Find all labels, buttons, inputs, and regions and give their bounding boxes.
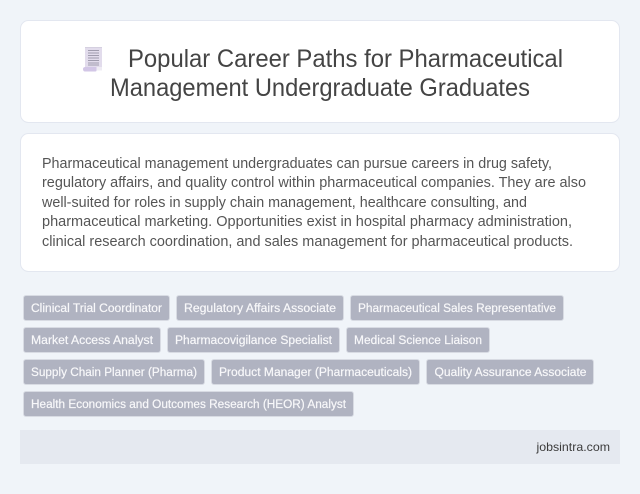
text block: description: well-suited for roles in supply chain management, healthcare consulting, and bbox=[41, 195, 527, 211]
tag: Product Manager (Pharmaceuticals) bbox=[212, 360, 420, 384]
tag: Pharmaceutical Sales Representative bbox=[350, 296, 564, 320]
tag: Health Economics and Outcomes Research (HEOR) Analyst: Health Economics and Outcomes Research (HEOR) Analyst bbox=[31, 397, 347, 411]
tag: Supply Chain Planner (Pharma): Supply Chain Planner (Pharma) bbox=[31, 365, 197, 379]
tag: Product Manager (Pharmaceuticals): Product Manager (Pharmaceuticals) bbox=[219, 365, 412, 379]
tag: Clinical Trial Coordinator bbox=[24, 296, 170, 320]
tag list: career paths bbox=[24, 296, 594, 416]
footer bar bbox=[20, 430, 620, 464]
text block: description: regulatory affairs, and quality control within pharmaceutical companies. They are also bbox=[42, 175, 586, 191]
text block: description: pharmaceutical marketing. Opportunities exist in hospital pharmacy administration, bbox=[42, 214, 572, 230]
tag: Health Economics and Outcomes Research (HEOR) Analyst bbox=[24, 392, 354, 416]
title: Management Undergraduate Graduates bbox=[110, 75, 530, 102]
title: Popular Career Paths for Pharmaceutical bbox=[128, 46, 563, 73]
tag: Clinical Trial Coordinator: Clinical Trial Coordinator bbox=[31, 301, 162, 315]
text block: description: clinical research coordination, and sales management for pharmaceutical products. bbox=[42, 234, 573, 250]
tag: Supply Chain Planner (Pharma) bbox=[24, 360, 204, 384]
tag: Medical Science Liaison bbox=[346, 328, 490, 352]
text block: description bbox=[41, 156, 586, 250]
icon: paper scroll bbox=[83, 47, 102, 72]
tag: Pharmaceutical Sales Representative: Pharmaceutical Sales Representative bbox=[358, 301, 556, 315]
tag: Quality Assurance Associate bbox=[426, 360, 594, 384]
tag: Regulatory Affairs Associate bbox=[176, 296, 344, 320]
tag: Market Access Analyst: Market Access Analyst bbox=[31, 333, 154, 347]
footer source text: jobsintra.com bbox=[535, 440, 610, 454]
tag: Market Access Analyst bbox=[24, 328, 160, 352]
tag: Pharmacovigilance Specialist: Pharmacovigilance Specialist bbox=[175, 333, 333, 347]
panel: title header bbox=[20, 20, 620, 122]
tag: Quality Assurance Associate: Quality Assurance Associate bbox=[434, 365, 587, 379]
tag: Regulatory Affairs Associate: Regulatory Affairs Associate bbox=[184, 301, 336, 315]
tag: Pharmacovigilance Specialist bbox=[168, 328, 340, 352]
tag: Medical Science Liaison: Medical Science Liaison bbox=[354, 333, 482, 347]
title bbox=[110, 46, 563, 102]
panel: description bbox=[20, 134, 620, 272]
text block: description: Pharmaceutical management undergraduates can pursue careers in drug safety, bbox=[42, 156, 552, 172]
